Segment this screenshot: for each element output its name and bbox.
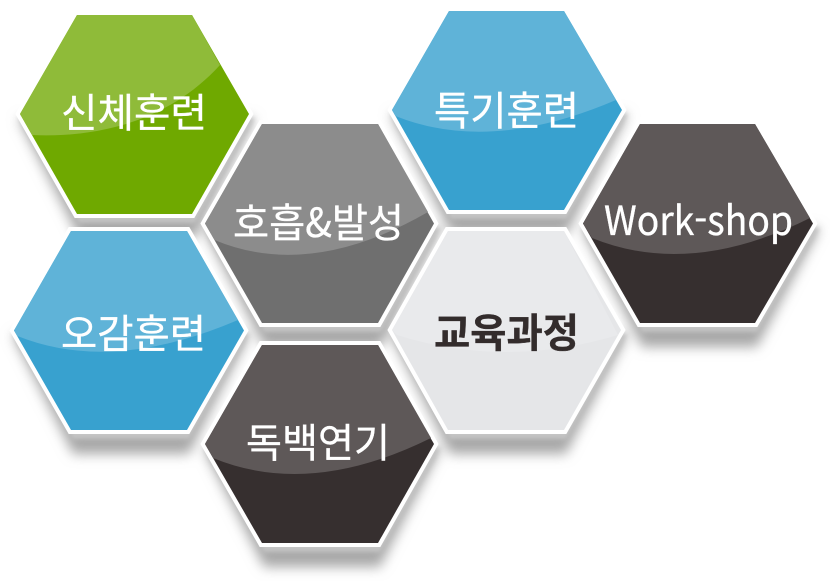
hexagon: Work-shop [583, 124, 813, 323]
hexagon: Work-shop: Work-shop [604, 189, 793, 247]
hexagon: 신체훈련: 신체훈련 [61, 81, 207, 139]
hexagon: 호흡&발성: 호흡&발성 [233, 191, 404, 249]
hexagon: 오감훈련 [14, 231, 244, 430]
hexagon: 특기훈련 [392, 11, 622, 210]
hexagon: 교육과정: 교육과정 [434, 301, 579, 359]
hexagon: 특기훈련: 특기훈련 [434, 79, 579, 137]
hexagon: 호흡&발성 [205, 124, 434, 323]
hexagon: 오감훈련: 오감훈련 [61, 302, 206, 360]
hexagon: 독백연기: 독백연기 [246, 411, 390, 469]
hexagon: 교육과정 [392, 231, 621, 430]
hexagon: 신체훈련 [20, 15, 249, 214]
hexagon: 독백연기 [205, 345, 434, 543]
